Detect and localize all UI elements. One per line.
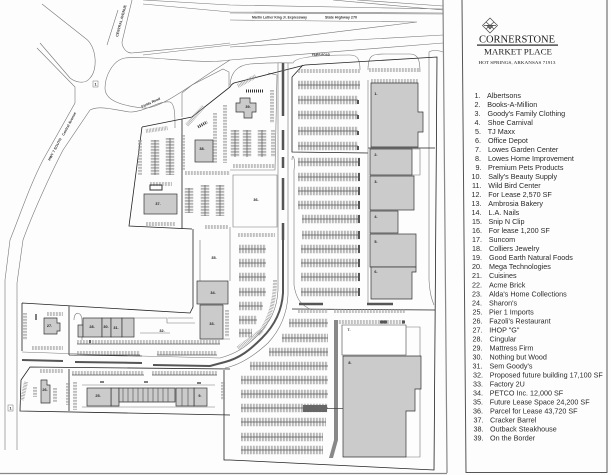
- buildings 28 to 31: [78, 318, 134, 337]
- building 34: [197, 281, 228, 304]
- address: HOT SPRINGS, ARKANSAS 71913: [478, 60, 556, 66]
- building 2: [370, 149, 420, 175]
- tenant list: 3.: [474, 109, 480, 118]
- building 25: [87, 388, 111, 406]
- highway lanes: [143, 0, 443, 60]
- building 27: 27.: [47, 324, 52, 328]
- panel: site map: [0, 0, 447, 474]
- tenant list: TJ Maxx: [488, 127, 515, 136]
- site marker lower: [8, 405, 13, 411]
- title rule: [477, 44, 558, 46]
- building 3: [370, 176, 414, 210]
- tenant list: Goody's Family Clothing: [488, 109, 565, 118]
- tenant list: Cuisines: [489, 271, 517, 280]
- dark bars near drive: [299, 303, 393, 305]
- tenant list: 14.: [472, 208, 482, 217]
- building 7: 7.: [347, 328, 351, 332]
- tenant list: 33.: [473, 380, 483, 388]
- main drive dark median: [22, 63, 312, 368]
- tenant list: Future Lease Space 24,200 SF: [490, 398, 590, 406]
- tenant list: Shoe Carnival: [488, 118, 533, 127]
- legend border: [462, 0, 607, 472]
- tenant list: 18.: [472, 244, 482, 253]
- tenant list: 39.: [474, 434, 484, 442]
- parking: east central rows: [298, 70, 420, 296]
- tenant list: Premium Pets Products: [488, 163, 564, 172]
- tenant list: Snip N Clip: [488, 217, 524, 226]
- tenant list: 26.: [472, 316, 482, 326]
- tenant list: 35.: [473, 398, 483, 406]
- tenant list: 28.: [472, 334, 482, 344]
- parcel 35: 35.: [211, 256, 217, 260]
- buildings 28 to 31: 30.: [103, 325, 109, 329]
- tenant list: Mega Technologies: [489, 262, 551, 271]
- tenant list: PETCO Inc. 12,000 SF: [490, 388, 564, 398]
- highway label: Martin Luther King Jr. Expressway: [252, 16, 307, 20]
- tenant list: Sharon's: [489, 298, 518, 308]
- tenant list: 22.: [472, 280, 482, 290]
- building 6: 6.: [374, 270, 378, 274]
- frontage road: [5, 0, 443, 450]
- tenant list: 6.: [475, 136, 481, 145]
- panel: legend frame: [462, 0, 607, 472]
- building 32 proposed: [134, 318, 195, 333]
- tenant list: Cracker Barrel: [490, 416, 537, 424]
- tenant list: 8.: [475, 154, 481, 163]
- tenant list: 25.: [472, 308, 482, 316]
- building 37: 37.: [155, 202, 161, 206]
- tenant list: 9.: [476, 163, 482, 172]
- tenant list: Alda's Home Collections: [489, 290, 567, 298]
- tenant list: 32.: [473, 370, 483, 380]
- building 3: 3.: [374, 180, 378, 184]
- tenant list: Lowes Home Improvement: [488, 154, 574, 163]
- tenant list: 13.: [472, 199, 482, 208]
- tenant list: 34.: [473, 388, 483, 398]
- tenant list: Parcel for Lease 43,720 SF: [490, 406, 578, 416]
- tenant list: 2.: [474, 100, 480, 109]
- tenant list: 24.: [472, 298, 482, 308]
- Highway 7 label: HWY 7 SOUTH: [47, 137, 63, 161]
- site marker upper: [93, 81, 98, 87]
- tenant list: 27.: [472, 326, 482, 334]
- tenant list: 36.: [473, 406, 483, 416]
- tenant list: L.A. Nails: [488, 208, 520, 217]
- building 6: [371, 267, 416, 299]
- building 4: [370, 211, 398, 233]
- Frontage label: Fields Road: [141, 97, 161, 109]
- building 5: [370, 234, 416, 267]
- Fields Road label: FAIRS ROAD: [312, 53, 330, 57]
- tenant list: 5.: [475, 127, 481, 136]
- tenant list: 16.: [472, 226, 482, 235]
- building 38: [195, 122, 213, 162]
- parcel 36: 36.: [253, 198, 259, 202]
- tenant list: 38.: [474, 424, 484, 434]
- tenant list: Sem Goody's: [490, 362, 533, 370]
- buildings 28 to 31: 28.: [89, 325, 95, 329]
- tenant list: Books-A-Million: [487, 100, 537, 109]
- tenant list: 19.: [472, 253, 482, 262]
- tenant list: Factory 2U: [490, 380, 525, 388]
- north side road curbs: [182, 50, 443, 305]
- building 39: [236, 91, 263, 118]
- tenant list: [472, 91, 603, 442]
- building 26: 26.: [42, 388, 48, 392]
- building 1: [371, 83, 423, 147]
- site marker lower: 1: [9, 406, 12, 410]
- tenant list: Mattress Firm: [490, 344, 533, 352]
- building 2: 2.: [374, 153, 378, 157]
- tenant list: For lease 1,200 SF: [489, 226, 550, 235]
- title: Cornerstone: CORNERSTONE: [479, 34, 555, 46]
- tenant list: Albertsons: [487, 91, 521, 100]
- building 1: 1.: [374, 92, 378, 96]
- tenant list: 17.: [472, 235, 482, 244]
- tenant list: Good Earth Natural Foods: [489, 253, 573, 262]
- tenant list: 31.: [472, 362, 482, 370]
- tenant list: Suncom: [489, 235, 515, 244]
- tenant list: 10.: [472, 172, 482, 181]
- tenant list: For Lease 2,570 SF: [488, 190, 552, 199]
- tenant list: 30.: [472, 352, 482, 362]
- tenant list: 15.: [472, 217, 482, 226]
- tenant list: Office Depot: [488, 136, 528, 145]
- property boundary: [20, 57, 437, 470]
- tenant list: On the Border: [490, 434, 536, 442]
- building 9 and shop strip: [111, 388, 207, 406]
- tenant list: 11.: [472, 181, 482, 190]
- tenant list: 1.: [474, 91, 480, 100]
- parking: south central rows: [241, 311, 405, 450]
- building 34: 34.: [210, 291, 216, 295]
- parking: west of drive: [140, 76, 275, 348]
- building 25: 25.: [95, 394, 101, 398]
- tenant list: Fazoli's Restaurant: [489, 316, 551, 326]
- pad boxes: [140, 175, 277, 339]
- building 33: 33.: [209, 322, 215, 326]
- tenant list: Pier 1 Imports: [489, 308, 534, 316]
- building 4: 4.: [374, 215, 378, 219]
- Central Avenue label lower: Central Avenue: [61, 112, 77, 136]
- building 37: [144, 185, 177, 214]
- tenant list: Proposed future building 17,100 SF: [490, 370, 603, 380]
- site marker upper: 1: [94, 82, 97, 86]
- tenant list: Cingular: [490, 334, 517, 344]
- tenant list: 12.: [472, 190, 482, 199]
- tenant list: 37.: [474, 416, 484, 424]
- tenant list: 4.: [474, 118, 480, 127]
- tenant list: Nothing but Wood: [490, 352, 547, 362]
- building 8: 8.: [348, 361, 352, 365]
- building 38: 38.: [199, 147, 205, 151]
- building 5: 5.: [374, 240, 378, 244]
- building 33: [200, 305, 223, 339]
- pedestrian walkway: [303, 320, 345, 458]
- tenant list: 23.: [472, 290, 482, 298]
- tenant list: Sally's Beauty Supply: [488, 172, 557, 181]
- building 7: [342, 325, 420, 457]
- building 32 proposed: 32.: [159, 329, 165, 333]
- tenant list: Colliers Jewelry: [489, 244, 540, 253]
- tenant list: IHOP "G": [489, 326, 520, 334]
- tenant list: Lowes Garden Center: [488, 145, 559, 154]
- tenant list: 21.: [472, 271, 482, 280]
- building 39: 39.: [245, 105, 251, 109]
- highway number label: State Highway 270: [325, 16, 357, 20]
- map frame: [0, 0, 447, 474]
- tenant list: Ambrosia Bakery: [488, 199, 543, 208]
- tenant list: 7.: [475, 145, 481, 154]
- tenant list: 29.: [472, 344, 482, 352]
- tenant list: Acme Brick: [489, 280, 526, 290]
- building 8: [343, 356, 421, 457]
- icon: cornerstone diamond logo: [482, 18, 498, 33]
- building 9 and shop strip: 9.: [198, 394, 202, 398]
- buildings 28 to 31: 31.: [113, 326, 119, 330]
- building 27: [44, 318, 60, 334]
- tenant list: Wild Bird Center: [488, 181, 541, 190]
- tenant list: 20.: [472, 262, 482, 271]
- subtitle: Market Place: MARKET PLACE: [484, 46, 552, 56]
- Central Avenue label: CENTRAL AVENUE: [115, 4, 128, 37]
- parking: south-west rows: [22, 310, 227, 410]
- building 26: [41, 380, 50, 403]
- tenant list: Outback Steakhouse: [490, 424, 557, 434]
